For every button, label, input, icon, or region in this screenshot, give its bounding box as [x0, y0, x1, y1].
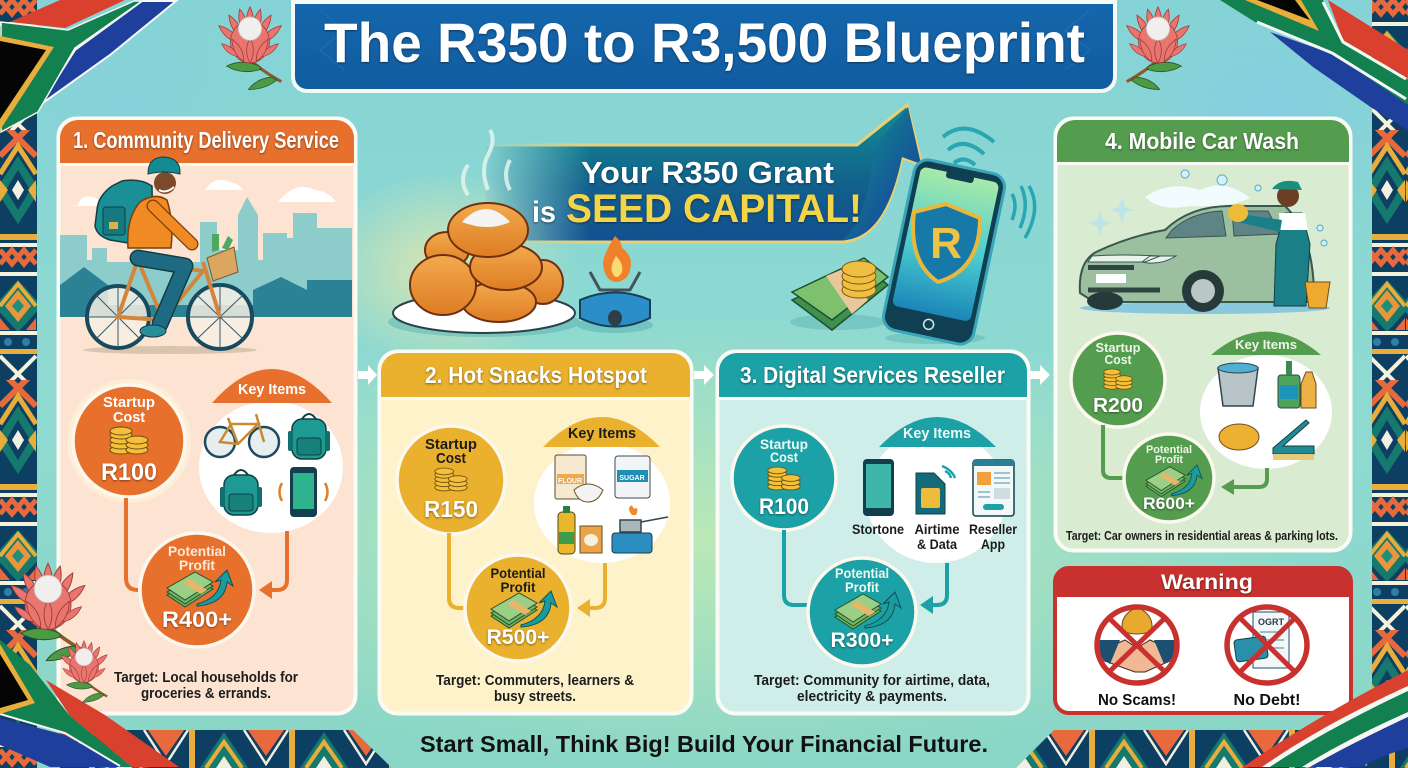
target text: electricity & payments.	[797, 688, 947, 705]
arrow: panel 2 to 3	[694, 365, 714, 385]
icon: smartphone	[863, 459, 894, 516]
labels: key items: Airtime	[914, 521, 960, 537]
icon: rand shield	[913, 204, 980, 282]
target text: Target: Car owners in residential areas & parking lots.	[1066, 529, 1338, 543]
potential profit circle	[140, 533, 254, 647]
potential profit circle: Potential	[835, 565, 889, 581]
startup cost circle: R200	[1093, 395, 1143, 417]
startup cost circle: Startup	[1096, 340, 1141, 355]
illustration: car wash	[1080, 170, 1330, 314]
key items circle	[534, 417, 670, 563]
panel 4: mobile car wash	[1056, 118, 1350, 550]
key items circle	[852, 417, 1017, 563]
labels: key items: Reseller	[969, 521, 1017, 537]
labels: key items: & Data	[917, 536, 957, 552]
potential profit circle: Profit	[845, 579, 879, 595]
connector: startup to profit	[449, 533, 466, 608]
startup cost circle	[732, 426, 836, 530]
panel 3 heading: 3. Digital Services Reseller	[740, 362, 1005, 388]
potential profit circle: Potential	[490, 565, 546, 581]
startup cost circle	[397, 426, 505, 534]
key items circle: Key Items	[1235, 337, 1297, 352]
startup cost circle: R100	[759, 494, 809, 519]
potential profit circle: Profit	[500, 579, 536, 595]
labels: key items: Stortone	[852, 521, 904, 537]
icon: flour bag	[555, 455, 586, 499]
icon: scrub brush	[1273, 420, 1314, 460]
target text: Target: Local households for	[114, 669, 298, 686]
startup cost circle: R100	[101, 459, 157, 486]
target text	[436, 672, 634, 705]
key items circle	[1200, 332, 1332, 469]
startup cost circle	[67, 379, 191, 503]
panel 1: community delivery service	[58, 118, 356, 714]
startup cost circle: Cost	[436, 450, 466, 467]
target text: groceries & errands.	[141, 685, 271, 702]
icon: bicycle	[205, 414, 279, 457]
potential profit circle: Potential	[168, 543, 226, 559]
illustration: smartphone with shield	[881, 129, 1035, 347]
flower: protea small bottom left	[59, 641, 109, 702]
icon: gas stove with pot	[612, 505, 668, 553]
panel 1 heading: 1. Community Delivery Service	[73, 127, 339, 153]
footer tagline: Start Small, Think Big! Build Your Financial Future.	[420, 731, 988, 757]
labels: key items: App	[981, 536, 1005, 552]
label: no debt: No Debt!	[1234, 692, 1300, 709]
connector: key items to profit	[1221, 468, 1267, 495]
labels: key items	[852, 521, 1017, 552]
left patterned border	[0, 0, 37, 768]
icon: wifi right	[1012, 186, 1035, 238]
key items circle: Key Items	[238, 381, 306, 398]
icon: no debt	[1227, 607, 1307, 683]
panel 2 heading: 2. Hot Snacks Hotspot	[425, 362, 647, 388]
right patterned border	[1372, 0, 1408, 768]
illustration: vetkoek on plate	[388, 130, 580, 337]
label: no scams: No Scams!	[1098, 692, 1176, 709]
icon: smartphone	[280, 467, 328, 517]
banner text line 1: Your R350 Grant	[581, 155, 834, 190]
illustration: gas stove with flame	[577, 236, 653, 333]
flag: bottom left corner	[0, 640, 179, 767]
startup cost circle: Startup	[103, 394, 155, 411]
icon: reseller app tablet	[973, 460, 1014, 516]
flag: top right corner	[1220, 0, 1408, 130]
flower: protea large bottom left	[8, 563, 88, 661]
icon: flour bag: FLOUR	[558, 478, 582, 485]
icon: sponge	[1219, 424, 1259, 450]
startup cost circle: Cost	[1104, 352, 1132, 367]
flower: protea top right	[1125, 7, 1191, 89]
icon: no scams	[1097, 607, 1177, 683]
connector: key items to profit	[920, 563, 947, 614]
target text	[114, 669, 298, 702]
potential profit circle: R500+	[486, 626, 550, 649]
icon: bucket	[1218, 363, 1258, 406]
potential profit circle: Profit	[1155, 454, 1183, 466]
icon: no debt: OGRT	[1258, 617, 1285, 627]
connector: key items to profit	[259, 531, 287, 599]
startup cost circle: Startup	[425, 436, 477, 453]
seed capital banner arrow	[484, 105, 922, 242]
startup cost circle: R150	[424, 496, 478, 522]
key items circle: Key Items	[568, 425, 636, 442]
flag: bottom right corner	[1243, 670, 1408, 767]
illustration: delivery cyclist in town	[60, 157, 352, 354]
key items circle: Key Items	[903, 425, 971, 442]
potential profit circle	[808, 558, 916, 666]
target text: busy streets.	[494, 688, 576, 705]
potential profit circle	[465, 555, 571, 661]
icon: sugar bag	[615, 456, 650, 498]
connector: startup to profit	[126, 498, 138, 590]
panel 4 heading: 4. Mobile Car Wash	[1105, 128, 1299, 154]
startup cost circle: Cost	[113, 409, 145, 426]
banner text line 2: is	[532, 196, 556, 229]
bottom patterned border right	[1016, 730, 1408, 768]
icon: wifi top	[943, 129, 994, 165]
startup cost circle	[1071, 333, 1165, 427]
connector: startup to profit	[784, 530, 809, 605]
key items circle	[199, 369, 343, 533]
potential profit circle	[1124, 434, 1214, 522]
icon: green backpack	[288, 414, 330, 459]
potential profit circle: Potential	[1146, 444, 1192, 456]
connector: startup to profit	[1103, 425, 1125, 478]
icon: sugar bag: SUGAR	[619, 475, 645, 482]
icon: teal backpack	[220, 470, 262, 515]
potential profit circle: R400+	[162, 607, 232, 632]
flag: top left corner	[0, 0, 176, 132]
arrow: panel 3 to 4	[1030, 365, 1050, 385]
panel: warning	[1055, 568, 1351, 713]
bottom patterned border left	[60, 730, 392, 768]
warning heading: Warning	[1161, 571, 1253, 594]
icon: soap bottles	[1278, 361, 1316, 408]
icon: rand shield: R	[930, 219, 962, 268]
banner text line 2: SEED CAPITAL!	[566, 187, 862, 231]
arrow: panel 1 to 2	[358, 365, 377, 385]
icon: bowl of flour	[574, 484, 603, 502]
icon: sim card	[916, 466, 955, 514]
panel 2: hot snacks hotspot	[380, 352, 692, 714]
illustration: cash and coins	[790, 258, 888, 330]
target text	[754, 672, 990, 705]
potential profit circle: R600+	[1143, 494, 1195, 513]
title text: The R350 to R3,500 Blueprint	[324, 11, 1085, 74]
startup cost circle: Startup	[760, 436, 808, 452]
flower: protea top left	[217, 7, 283, 89]
potential profit circle: Profit	[179, 557, 215, 573]
icon: spice box	[580, 526, 602, 553]
startup cost circle: Cost	[770, 449, 798, 465]
target text: Target: Commuters, learners &	[436, 672, 634, 689]
icon: oil bottle	[558, 506, 575, 554]
title banner	[293, 2, 1115, 91]
potential profit circle: R300+	[830, 629, 894, 652]
connector: key items to profit	[577, 563, 605, 617]
target text: Target: Community for airtime, data,	[754, 672, 990, 689]
